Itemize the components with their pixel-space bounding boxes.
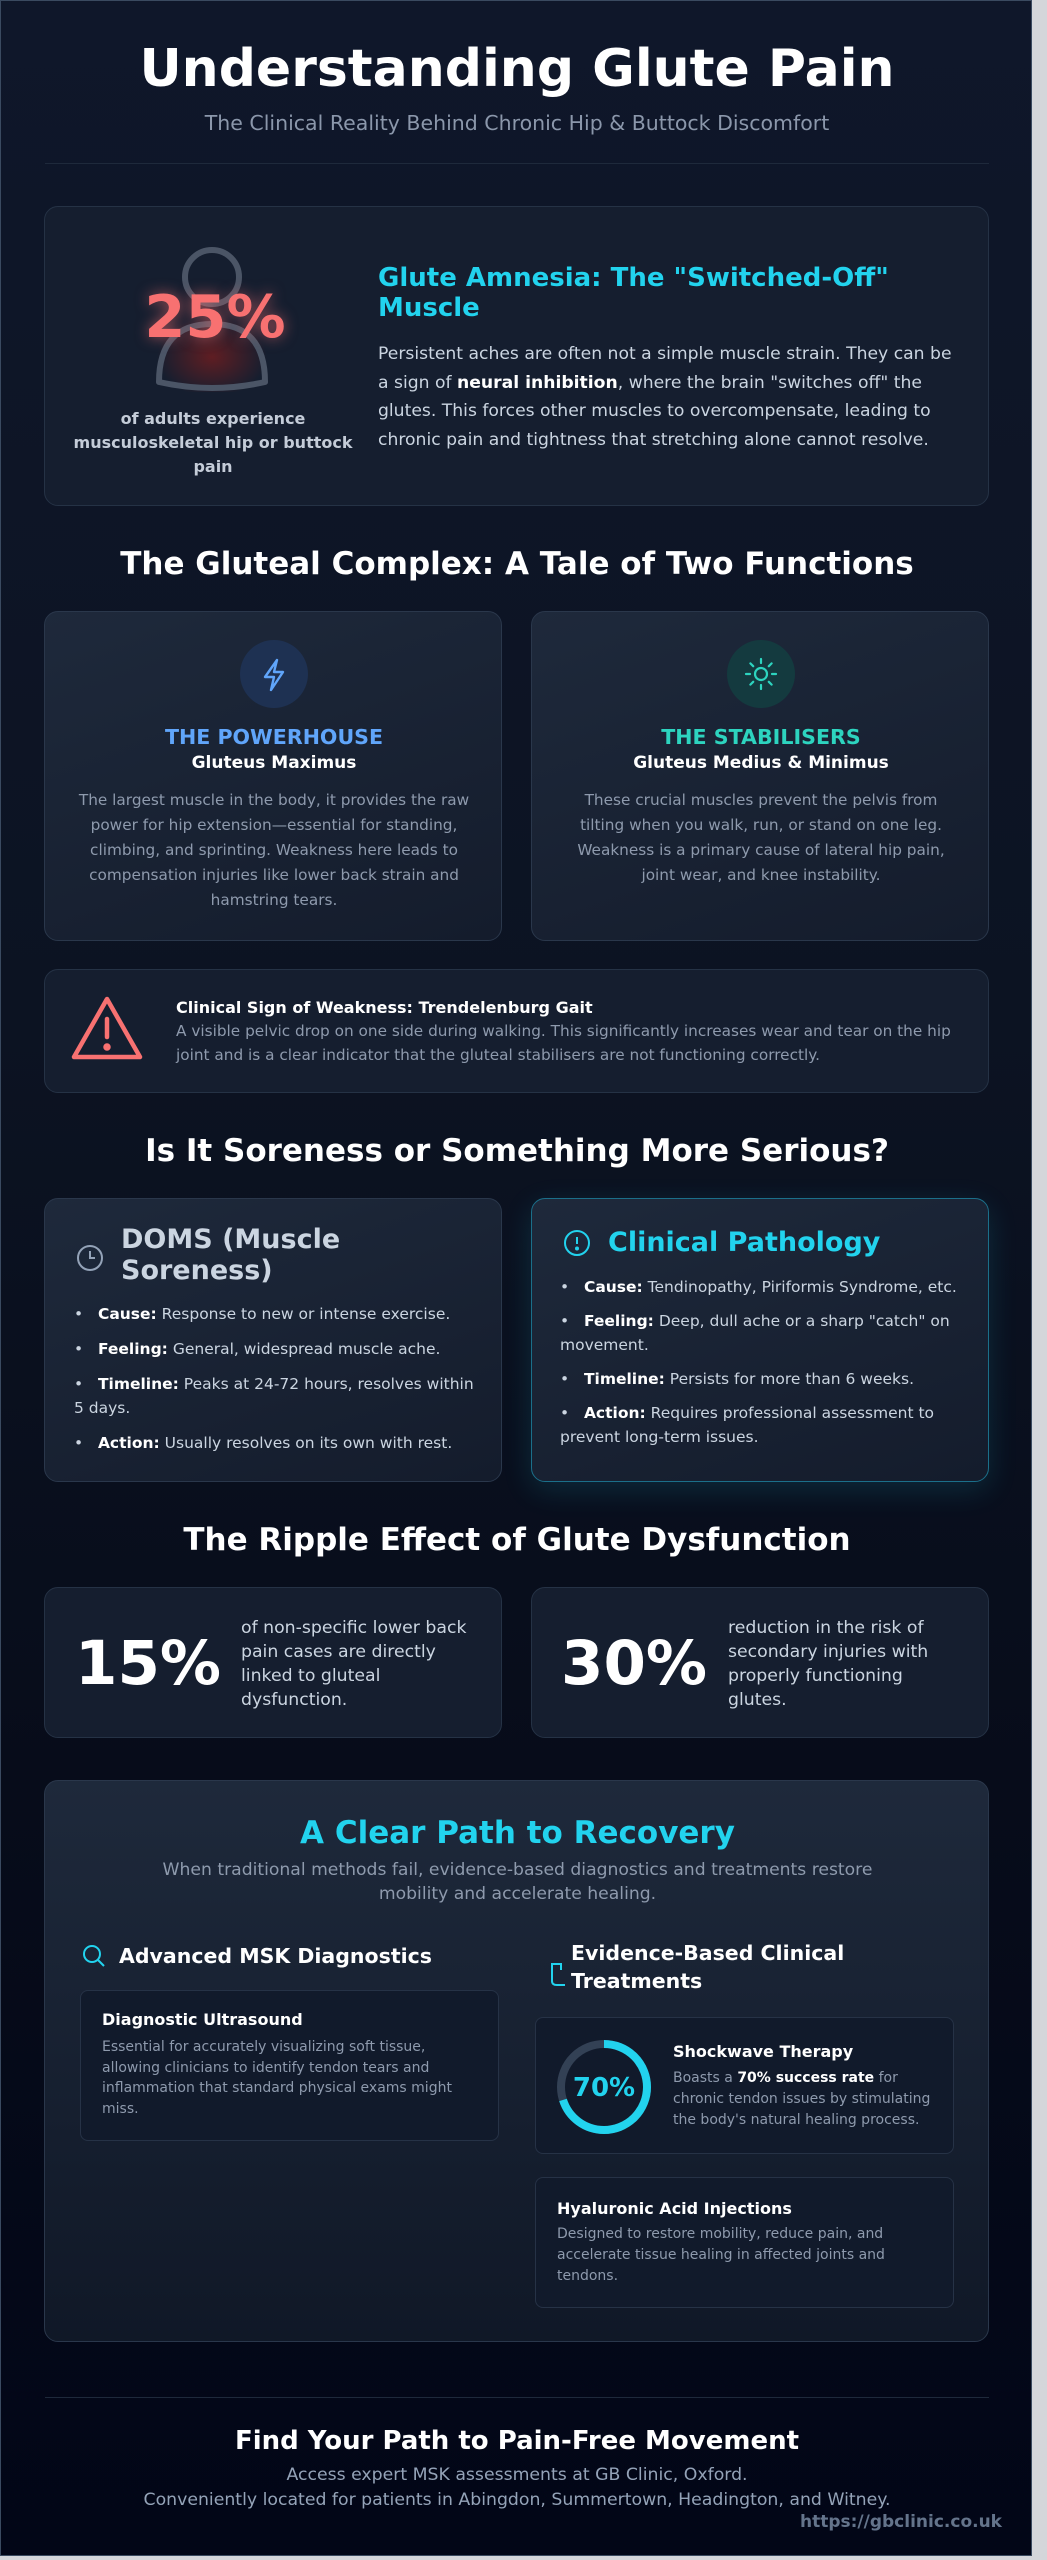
list: • Action: Requires professional assessment to prevent long-term issues. [560, 1404, 934, 1446]
title: Understanding Glute Pain [139, 39, 895, 99]
panel: glute amnesia [44, 206, 989, 506]
card: shockwave [535, 2017, 954, 2154]
paragraph: Persistent aches are often not a simple muscle strain. They can be a sign of neural inhibition, where the brain "switches off" the glutes. This forces other muscles to overcompensate, leading to chronic pain and tightness that stretching alone cannot resolve. [378, 344, 952, 450]
footer url: https://gbclinic.co.uk [800, 2512, 1002, 2532]
icon: person with 25% stat [156, 247, 268, 392]
list [74, 1305, 474, 1452]
card: shockwave: Shockwave Therapy [673, 2042, 853, 2061]
list: • Timeline: Peaks at 24-72 hours, resolves within 5 days. [74, 1375, 474, 1417]
list: • Cause: Tendinopathy, Piriformis Syndrome, etc. [560, 1278, 957, 1296]
donut chart: 70% [557, 2040, 651, 2134]
list: • Feeling: General, widespread muscle ache. [74, 1340, 440, 1358]
heading: THE STABILISERS [661, 725, 861, 749]
panel: stat 15% [44, 1587, 502, 1738]
list: • Feeling: Deep, dull ache or a sharp "catch" on movement. [560, 1312, 950, 1354]
icon: alert circle [564, 1230, 590, 1256]
icon: syringe-ish [551, 1963, 565, 1986]
icon: clock [77, 1245, 103, 1271]
heading: DOMS (Muscle Soreness) [121, 1224, 340, 1286]
stat: 25%: 25% [144, 282, 286, 351]
panel: trendelenburg callout [44, 969, 989, 1093]
icon: magnifier [83, 1945, 105, 1967]
donut chart: 70%: 70% [573, 2073, 635, 2103]
heading: soreness vs serious: Is It Soreness or Something More Serious? [145, 1133, 889, 1169]
card: hyaluronic: Hyaluronic Acid Injections [557, 2199, 792, 2218]
subheading: diagnostics: Advanced MSK Diagnostics [119, 1944, 432, 1968]
icon: lightning [240, 640, 308, 708]
list: • Timeline: Persists for more than 6 weeks. [560, 1370, 914, 1388]
heading: Glute Amnesia: The "Switched-Off" Muscle [378, 263, 889, 323]
text: The largest muscle in the body, it provides the raw power for hip extension—essential for standing, climbing, and sprinting. Weakness here leads to compensation injuries like lower back strain and hamstring tears. [79, 791, 469, 909]
panel: stabilisers [531, 611, 989, 941]
icon: warning triangle [72, 996, 142, 1060]
heading: A Clear Path to Recovery [300, 1815, 735, 1851]
caption: of adults experience musculoskeletal hip or buttock pain [74, 409, 352, 476]
stat number: 30% [561, 1628, 707, 1699]
panel: stat 30% [531, 1587, 989, 1738]
heading: Clinical Sign of Weakness: Trendelenburg Gait [176, 998, 593, 1017]
footer heading: Find Your Path to Pain-Free Movement [235, 2426, 799, 2456]
text: These crucial muscles prevent the pelvis from tilting when you walk, run, or stand on one leg. Weakness is a primary cause of lateral hip pain, joint wear, and knee instability. [577, 791, 945, 884]
card: shockwave: Boasts a 70% success rate for chronic tendon issues by stimulating the body's natural healing process. [673, 2070, 930, 2128]
heading: THE POWERHOUSE [165, 725, 383, 749]
heading: gluteal complex: The Gluteal Complex: A Tale of Two Functions [120, 546, 914, 582]
list: • Action: Usually resolves on its own with rest. [74, 1434, 452, 1452]
panel: DOMS [44, 1198, 502, 1482]
panel: path to recovery [44, 1780, 989, 2342]
card: hyaluronic [535, 2177, 954, 2308]
card: hyaluronic: Designed to restore mobility, reduce pain, and accelerate tissue healing in affected joints and tendons. [557, 2226, 885, 2284]
stat text: reduction in the risk of secondary injuries with properly functioning glutes. [728, 1618, 928, 1710]
list: • Cause: Response to new or intense exercise. [74, 1305, 450, 1323]
card: ultrasound: Essential for accurately visualizing soft tissue, allowing clinicians to identify tendon tears and inflammation that standard physical exams might miss. [102, 2039, 452, 2116]
list [560, 1278, 957, 1446]
stat text: of non-specific lower back pain cases are directly linked to gluteal dysfunction. [241, 1618, 466, 1710]
subheading: Gluteus Maximus [192, 753, 356, 773]
panel: powerhouse [44, 611, 502, 941]
panel: clinical pathology [531, 1198, 989, 1482]
icon: sun [727, 640, 795, 708]
footer text: Conveniently located for patients in Abingdon, Summertown, Headington, and Witney. [144, 2490, 890, 2510]
subtitle: When traditional methods fail, evidence-based diagnostics and treatments restore mobility and accelerate healing. [163, 1860, 872, 1904]
stat number: 15% [75, 1628, 221, 1699]
card: ultrasound [80, 1990, 499, 2141]
subtitle: The Clinical Reality Behind Chronic Hip & Buttock Discomfort [205, 111, 829, 135]
footer text [144, 2465, 890, 2510]
subheading: Gluteus Medius & Minimus [633, 753, 889, 773]
heading: Clinical Pathology [608, 1227, 880, 1258]
heading: ripple effect: The Ripple Effect of Glute Dysfunction [183, 1522, 851, 1558]
subheading: treatments: Evidence-Based Clinical Treatments [571, 1941, 844, 1993]
text: A visible pelvic drop on one side during walking. This significantly increases wear and tear on the hip joint and is a clear indicator that the gluteal stabilisers are not functioning correctly. [176, 1022, 951, 1064]
footer text: Access expert MSK assessments at GB Clinic, Oxford. [286, 2465, 748, 2485]
card: ultrasound: Diagnostic Ultrasound [102, 2010, 303, 2029]
